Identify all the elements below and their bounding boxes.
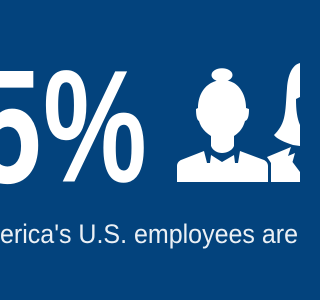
icon: woman with long hair bbox=[267, 63, 300, 182]
icon: woman with hair bun bbox=[177, 68, 268, 182]
big percentage figure: % bbox=[43, 36, 147, 216]
